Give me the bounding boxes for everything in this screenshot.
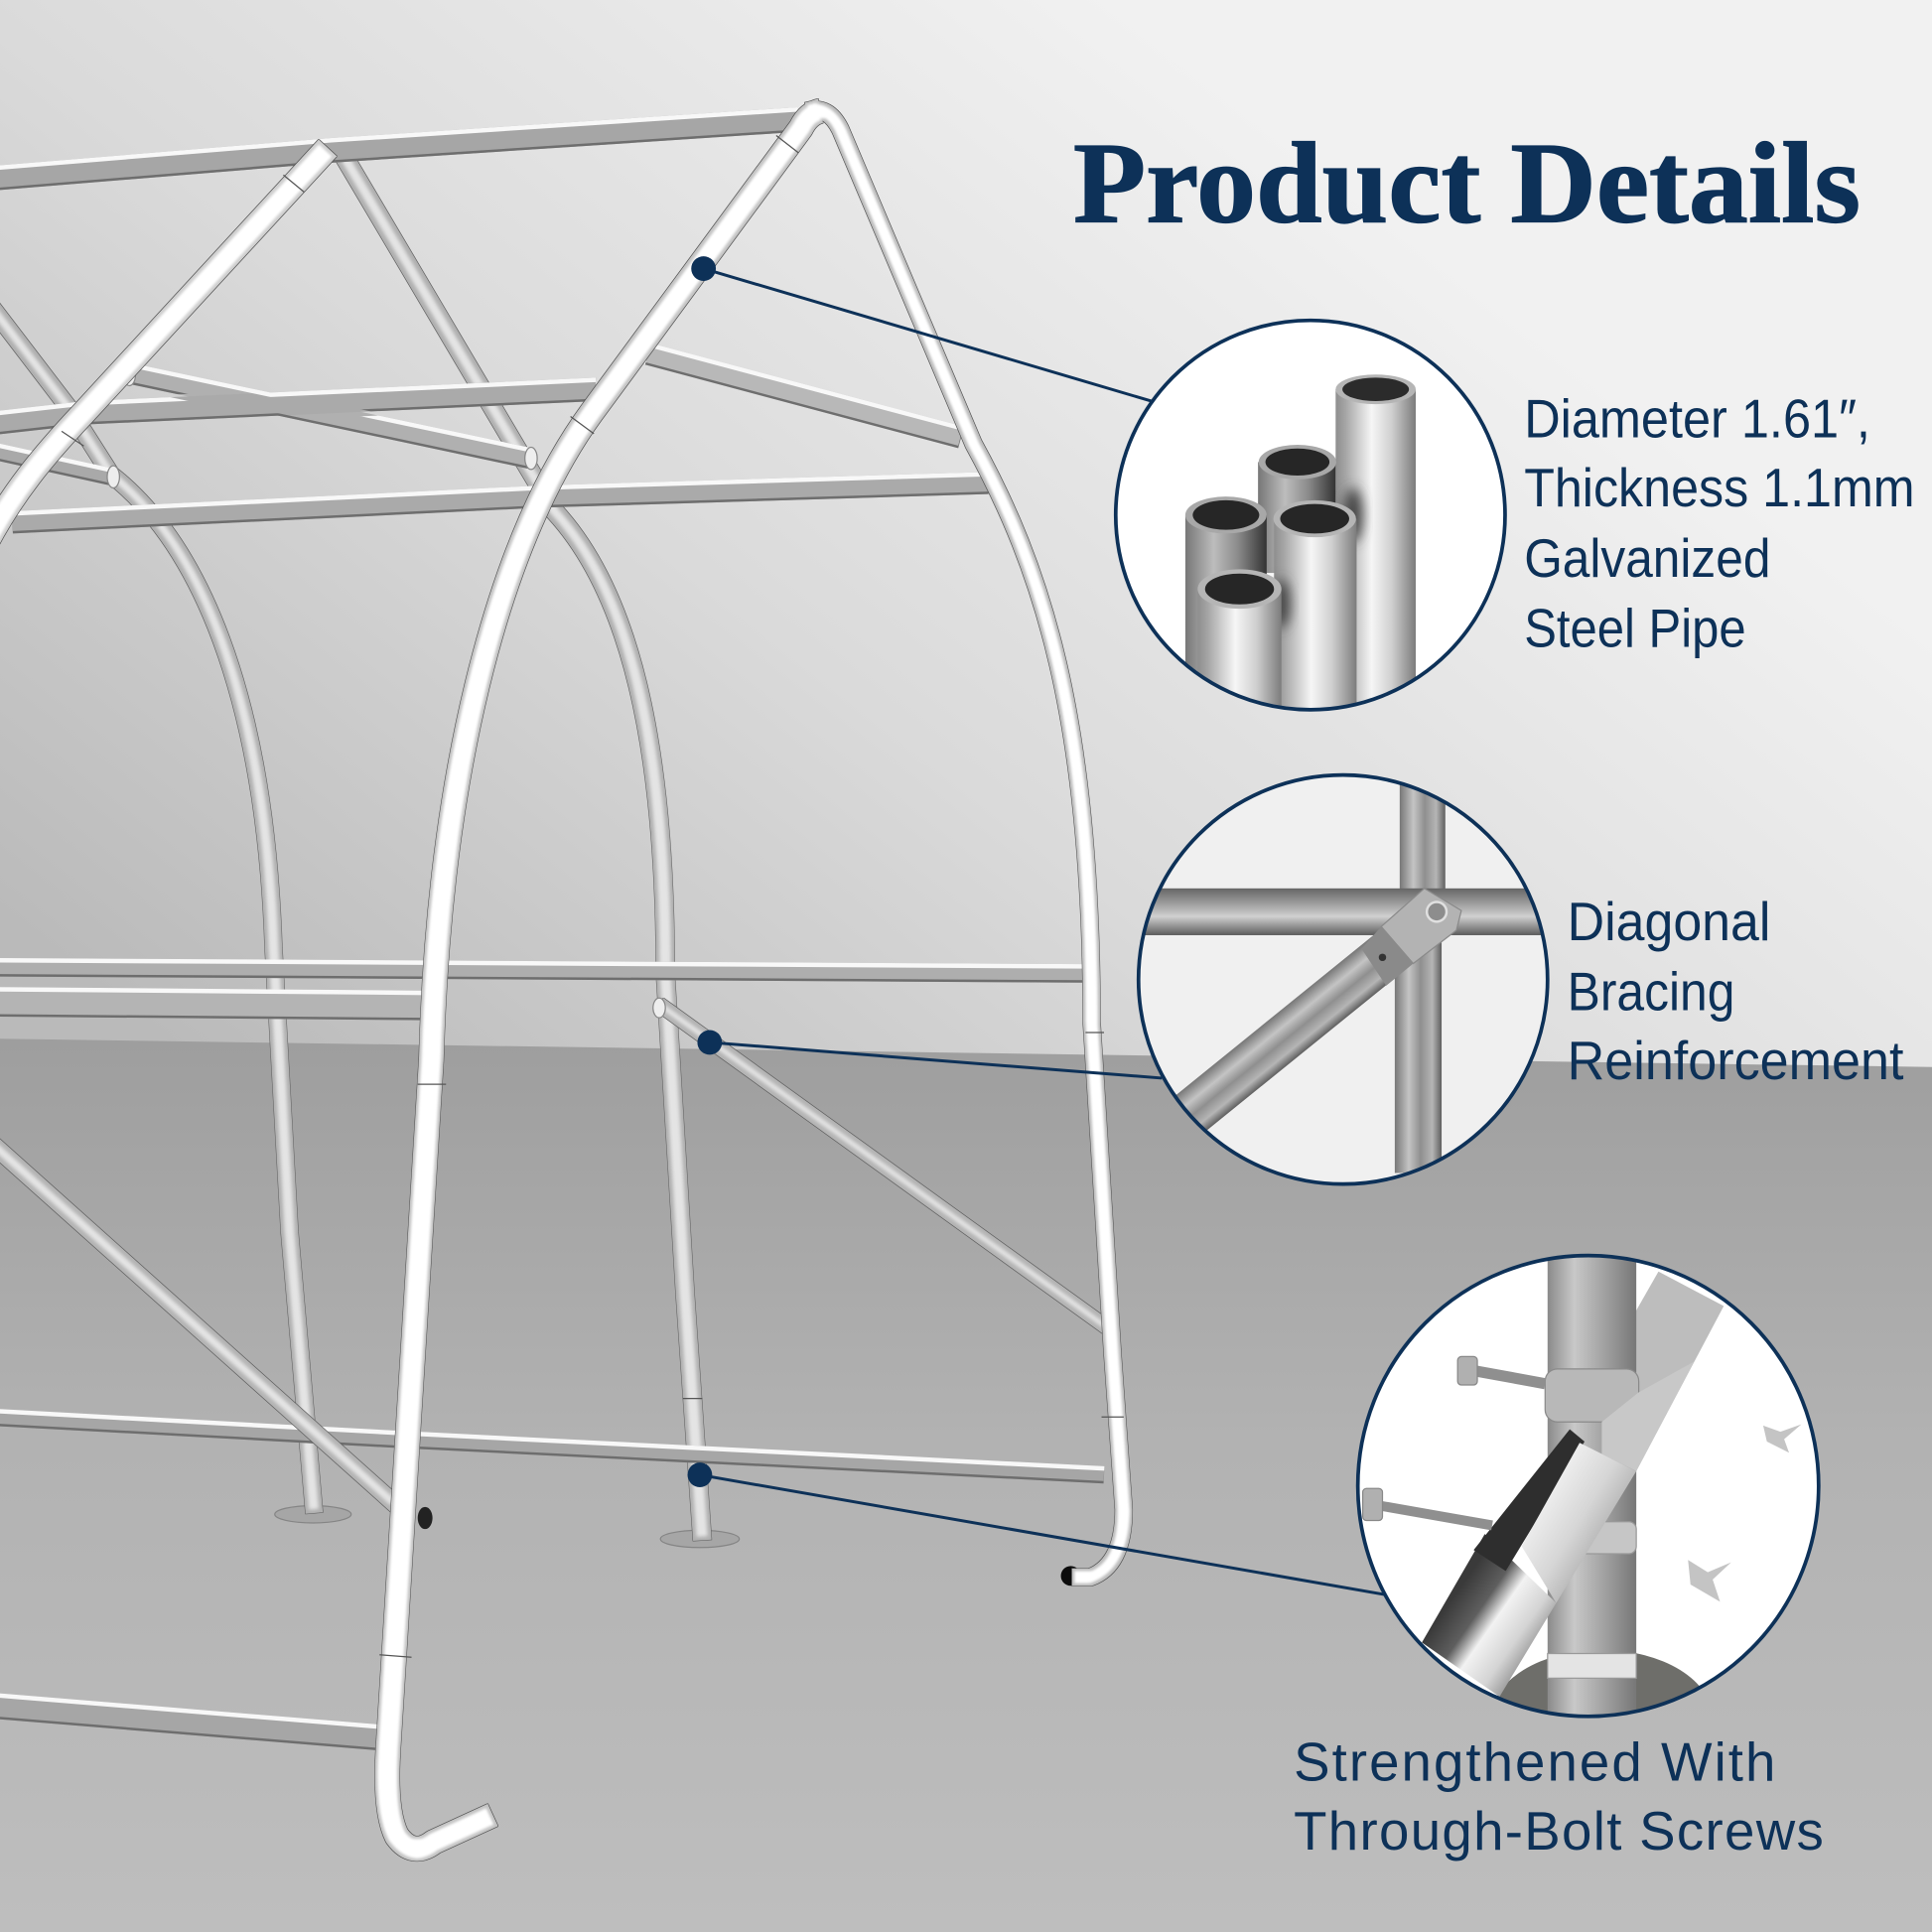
text: through-bolt screws	[1294, 1731, 1824, 1862]
text: through-bolt screws: Strengthened With	[1294, 1731, 1775, 1792]
text: pipe specification: Diameter 1.61″,	[1524, 389, 1870, 450]
greenhouse steel frame	[0, 109, 1124, 1849]
text: bracing: Bracing	[1568, 962, 1734, 1023]
pipe joints	[62, 136, 1124, 1657]
rear arches	[0, 154, 702, 1540]
text: pipe specification: Galvanized	[1524, 528, 1770, 589]
horizontal purlins and braces	[0, 119, 1104, 1737]
panel: steel pipe detail	[1116, 321, 1505, 728]
panel: diagonal bracing detail	[1106, 770, 1548, 1188]
callout leader: pipe	[691, 256, 1154, 402]
text: pipe specification	[1524, 389, 1915, 659]
front arch	[387, 109, 1124, 1849]
bracing joint photo	[1146, 784, 1541, 1173]
second arch rafter	[0, 148, 328, 545]
panel: through-bolt screws detail	[1356, 1253, 1821, 1719]
base plates	[275, 1506, 740, 1548]
text: bracing: Diagonal	[1568, 892, 1770, 952]
text: through-bolt screws: Through-Bolt Screws	[1294, 1801, 1824, 1862]
title: Product Details	[1073, 119, 1861, 247]
pipe end caps	[418, 1507, 1080, 1586]
bolted connector photo	[1362, 1257, 1801, 1715]
background wall	[0, 0, 1932, 1072]
text: bracing: Reinforcement	[1568, 1031, 1903, 1091]
lower diagonal braces	[0, 1004, 1111, 1506]
text: pipe specification: Steel Pipe	[1524, 599, 1746, 659]
brace connectors	[107, 363, 1116, 1339]
callout leader: bracing	[697, 1031, 1162, 1078]
background floor	[0, 1038, 1932, 1932]
steel pipe bundle	[1185, 374, 1416, 728]
text: bracing	[1568, 892, 1903, 1091]
callout leader: bolts	[688, 1462, 1384, 1594]
